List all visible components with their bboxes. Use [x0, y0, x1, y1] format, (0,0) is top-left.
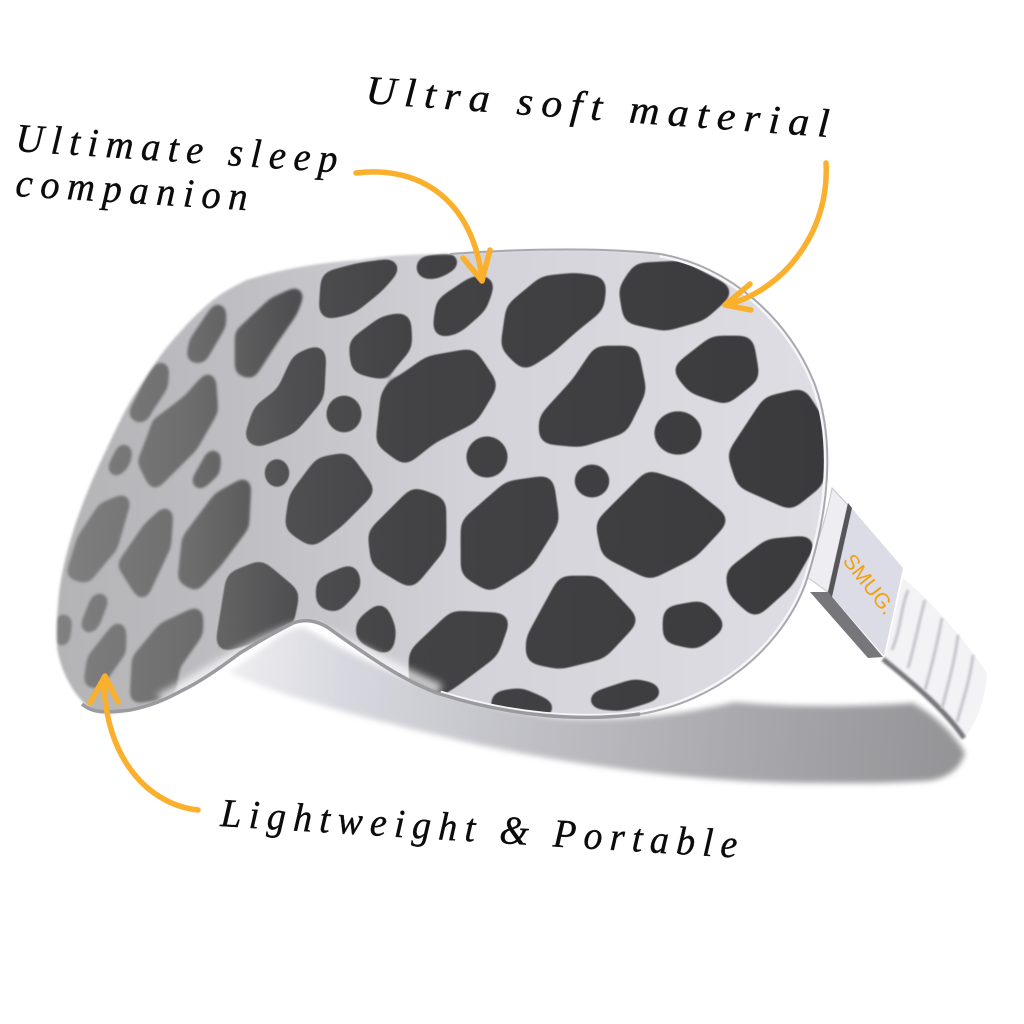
annotation: ultimate sleep companion: Ultimate sleep [14, 115, 347, 182]
annotation: ultra soft material: Ultra soft material [364, 67, 839, 147]
elastic strap [804, 488, 987, 738]
annotation: lightweight and portable: Lightweight & Portable [219, 790, 746, 867]
arrow: to top of mask [356, 172, 490, 281]
strap label tag [810, 503, 903, 658]
arrow: to mask material [725, 163, 826, 310]
cow spots, far side [61, 296, 295, 695]
right edge highlight [440, 254, 827, 717]
annotation: ultimate sleep companion: companion [14, 160, 257, 220]
infographic: eye mask with annotations [16, 77, 987, 858]
annotation: ultimate sleep companion [14, 115, 347, 220]
mask rim [82, 250, 827, 717]
brand text: SMUG. [838, 550, 899, 619]
mask body with cow print [40, 240, 840, 730]
cow spots, near side [225, 262, 820, 708]
cow spots, small round [273, 404, 693, 489]
lower edge highlight [160, 629, 440, 700]
strap shadow under mask [228, 628, 965, 783]
arrow: to lower left of mask [90, 676, 198, 810]
